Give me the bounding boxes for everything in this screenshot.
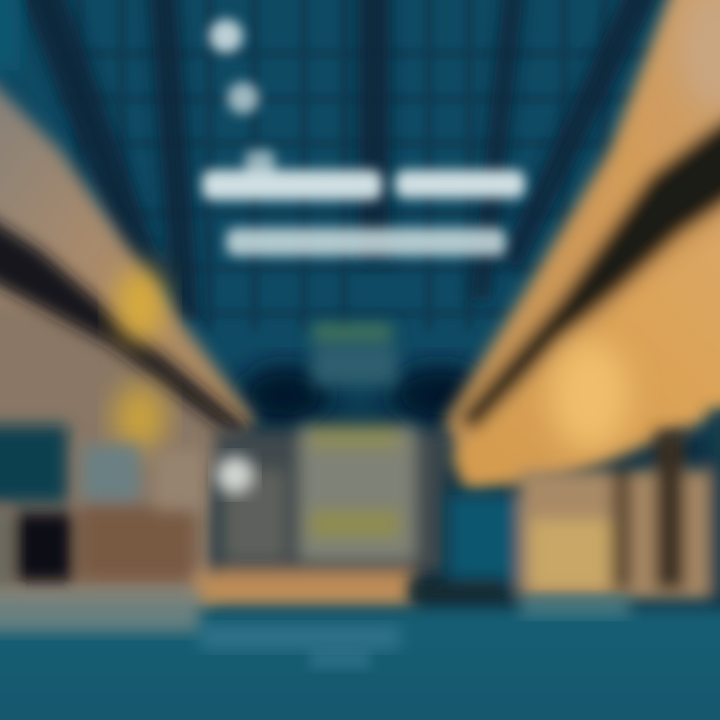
blurred icon dot: top — [209, 19, 243, 53]
left building facade — [0, 60, 255, 610]
right building facade — [410, 0, 720, 606]
central lobby — [195, 325, 445, 610]
blurred heading blobs — [202, 19, 525, 256]
blurred round lamp — [216, 456, 254, 494]
blurred heading line 1 — [202, 150, 525, 200]
floor — [0, 590, 720, 720]
blurred icon dot: second — [227, 82, 259, 114]
blurred heading line 2 — [226, 228, 506, 256]
